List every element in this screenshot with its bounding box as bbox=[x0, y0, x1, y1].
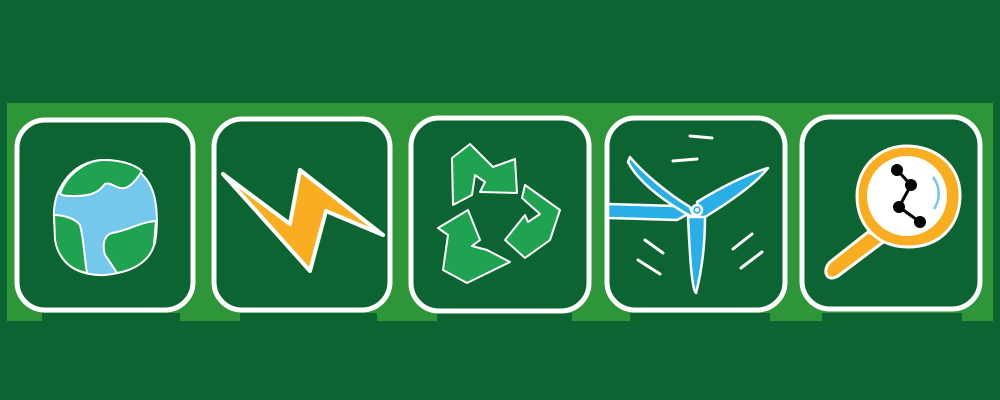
icon: globe bbox=[54, 160, 157, 275]
panel: earth bbox=[17, 120, 193, 310]
icon: recycle arrows bbox=[438, 144, 560, 283]
motion lines bbox=[638, 136, 762, 274]
panel: magnifier bbox=[802, 117, 980, 309]
panel: lightning bbox=[214, 119, 390, 310]
icon: turbine bbox=[608, 157, 768, 293]
panel: wind turbine bbox=[607, 118, 785, 310]
icon: magnifying glass bbox=[826, 146, 960, 278]
background strip bbox=[7, 103, 993, 323]
icon: lightning bolt bbox=[223, 170, 383, 271]
icon: molecule bbox=[892, 166, 924, 226]
panel: recycle bbox=[411, 118, 589, 311]
